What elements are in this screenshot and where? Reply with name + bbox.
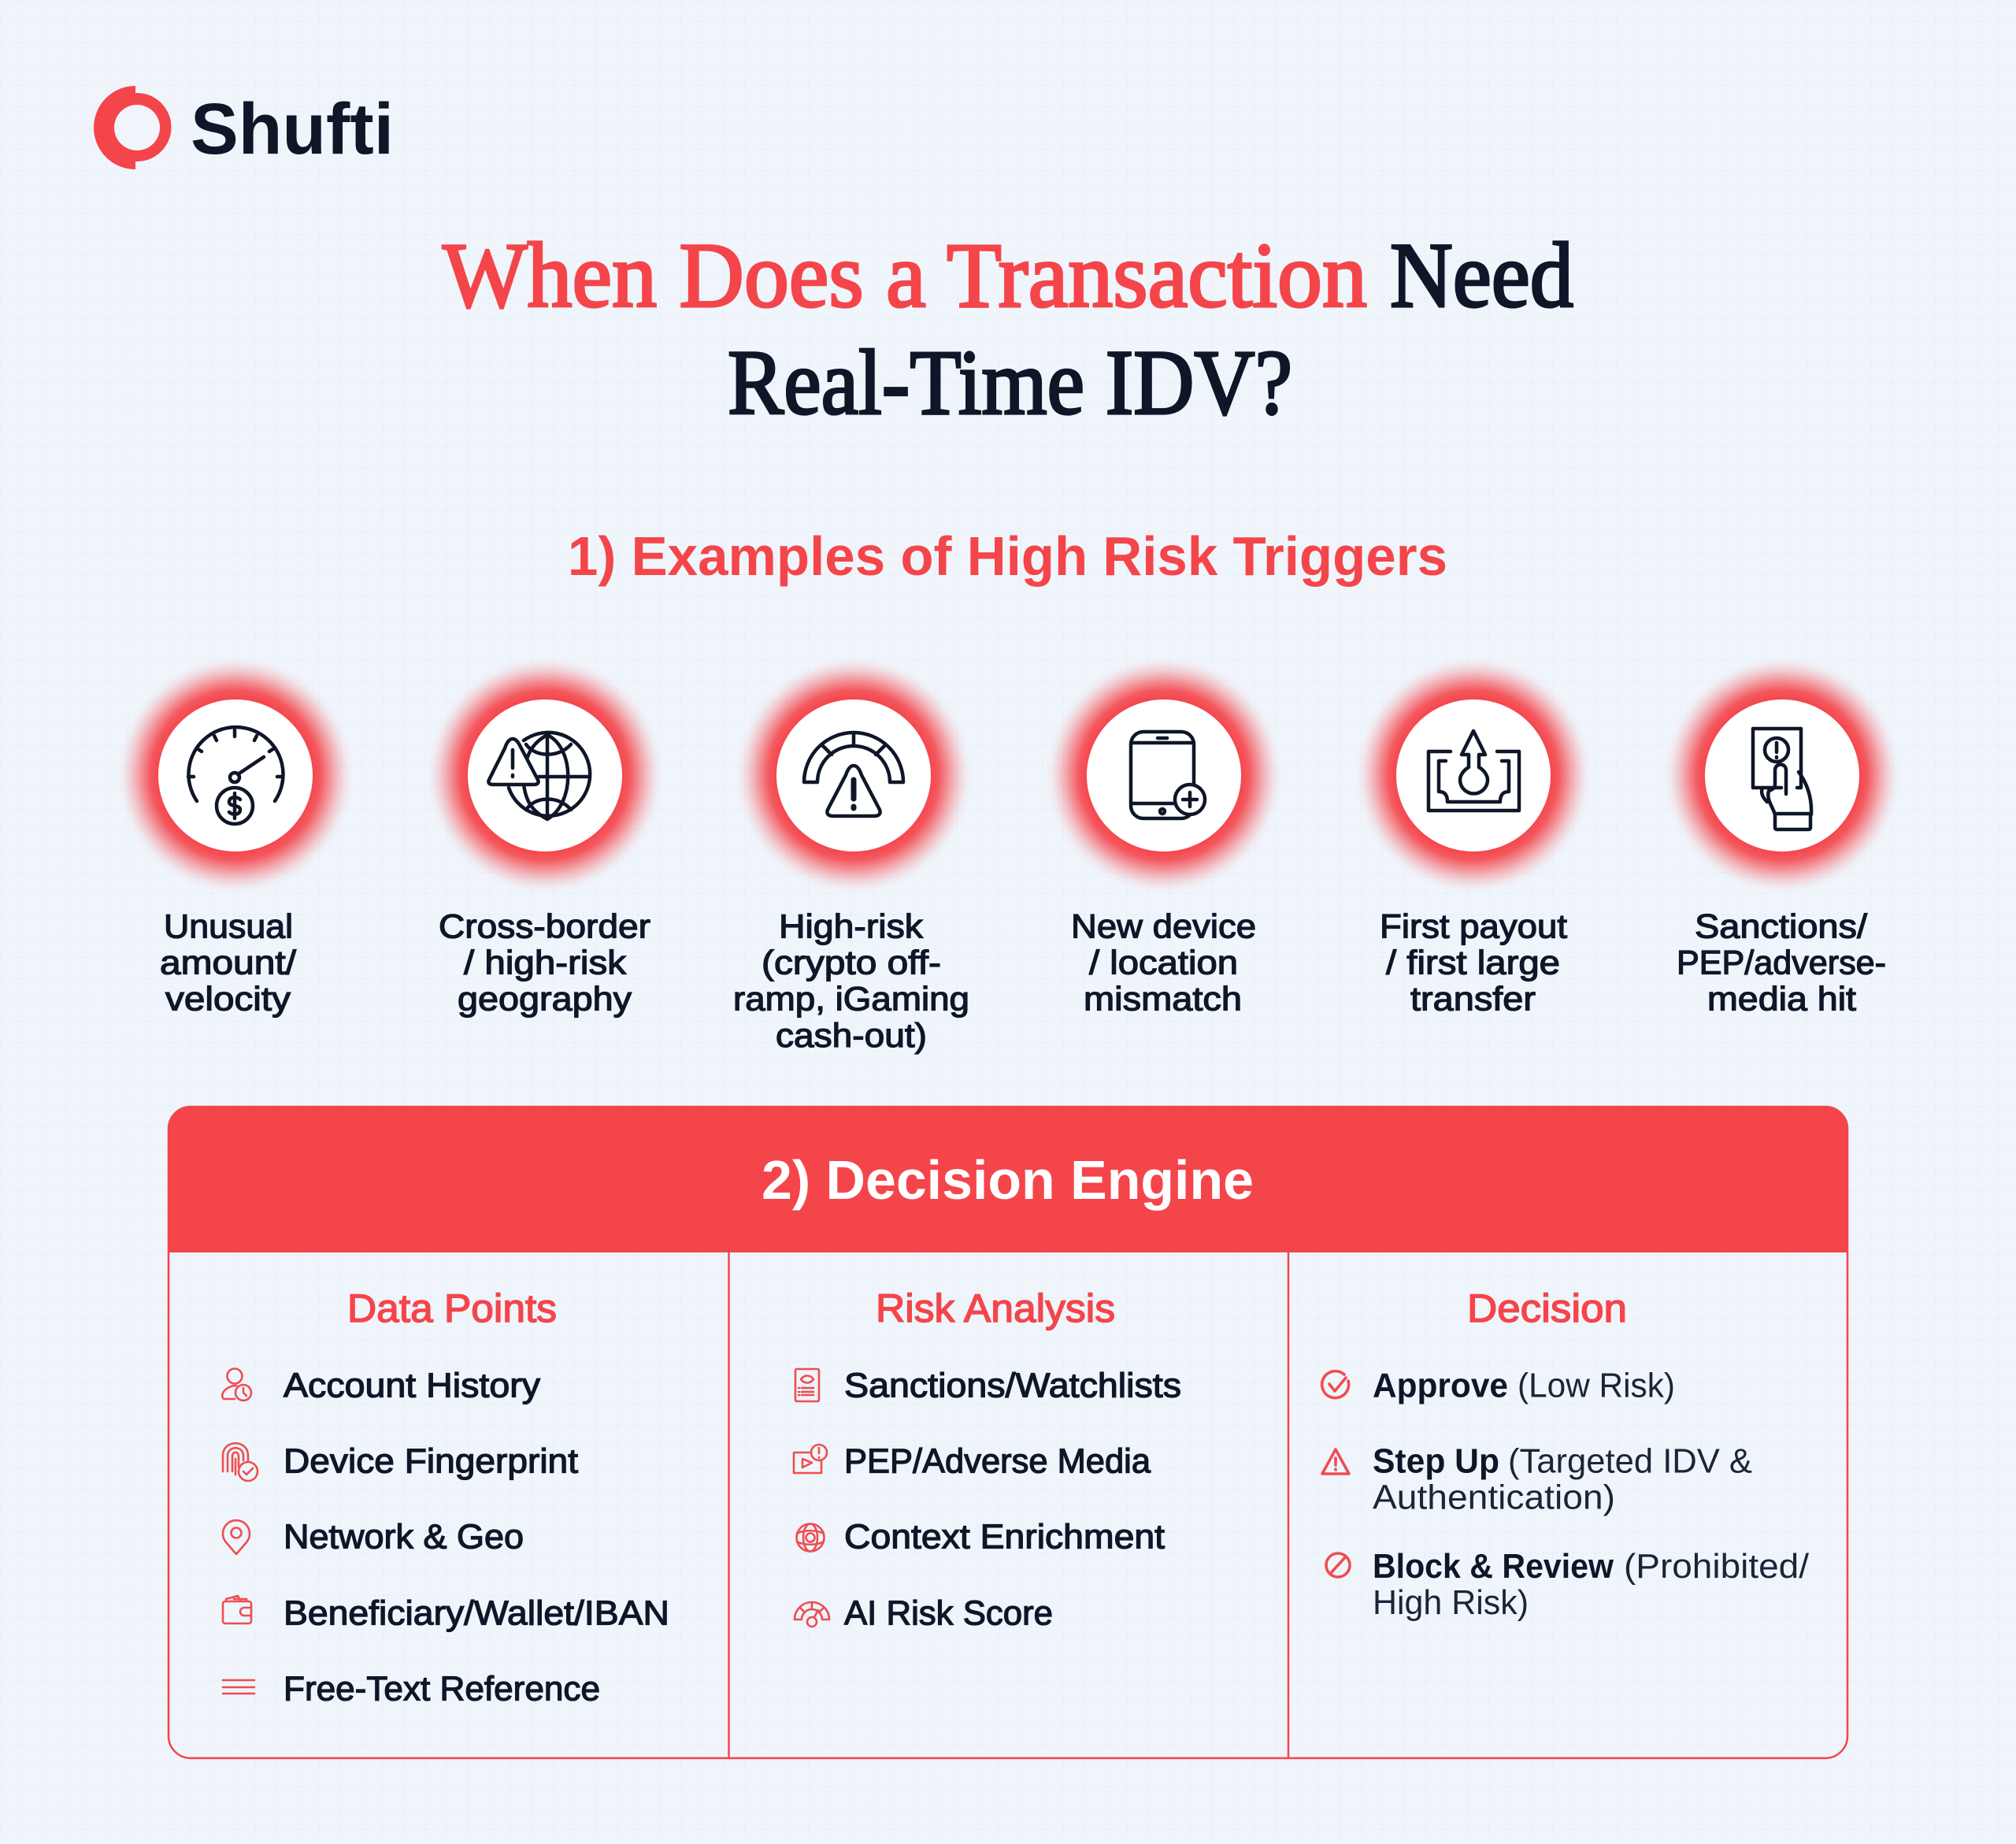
- logo: Shufti: Shufti: [191, 89, 394, 169]
- panel header: 2) Decision Engine: [762, 1149, 1254, 1211]
- column: risk analysis: Context Enrichment: [844, 1517, 1165, 1556]
- panel: decision engine: [169, 1107, 1847, 1758]
- trigger: new device / location mismatch: [1046, 657, 1282, 1018]
- trigger: cross-border / high-risk geography: Cross-border: [439, 907, 650, 945]
- step up text: Step Up: [1373, 1441, 1499, 1481]
- trigger: first payout / first large transfer: / first large: [1386, 944, 1560, 981]
- icon: globe with warning: [488, 733, 590, 819]
- column: risk analysis: PEP/Adverse Media: [844, 1441, 1151, 1481]
- trigger: high-risk crypto off-ramp, iGaming cash-out: cash-out): [776, 1017, 927, 1055]
- column: data points: Data Points: [347, 1286, 557, 1330]
- panel header: [169, 1107, 1847, 1252]
- approve text: (Low Risk): [1518, 1366, 1675, 1405]
- icon: money upload tray: [1429, 731, 1519, 811]
- trigger: sanctions / PEP / adverse-media hit: media hit: [1707, 980, 1856, 1018]
- block and review text: (Prohibited/: [1624, 1547, 1810, 1586]
- trigger: sanctions / PEP / adverse-media hit: PEP/adverse-: [1677, 944, 1886, 981]
- column: decision: Decision: [1467, 1286, 1627, 1330]
- trigger: new device / location mismatch: New device: [1071, 907, 1256, 945]
- column: decision: [1322, 1286, 1810, 1622]
- icon: warning triangle: [1322, 1449, 1349, 1474]
- trigger: cross-border / high-risk geography: / high-risk: [464, 944, 627, 981]
- trigger: unusual amount / velocity: [117, 657, 354, 1018]
- icon: speedometer with dollar: [188, 727, 284, 824]
- column: data points: [222, 1286, 669, 1708]
- icon: risk gauge with warning: [804, 733, 903, 816]
- trigger: high-risk crypto off-ramp, iGaming cash-out: (crypto off-: [762, 944, 941, 981]
- column: data points: Beneficiary/Wallet/IBAN: [284, 1594, 669, 1632]
- icon: account clock: [222, 1369, 251, 1401]
- column: risk analysis: AI Risk Score: [844, 1594, 1053, 1632]
- column: data points: Device Fingerprint: [284, 1441, 578, 1481]
- title: [443, 224, 1573, 434]
- trigger: unusual amount / velocity: amount/: [160, 944, 296, 981]
- trigger: unusual amount / velocity: Unusual: [164, 907, 293, 945]
- column: risk analysis: Sanctions/Watchlists: [844, 1366, 1181, 1405]
- icon: fingerprint check: [223, 1443, 258, 1481]
- title: Need: [1390, 224, 1573, 327]
- column: risk analysis: [794, 1286, 1181, 1632]
- trigger: first payout / first large transfer: First payout: [1380, 907, 1567, 945]
- trigger: cross-border / high-risk geography: [427, 657, 663, 1018]
- icon: hand holding alert card: [1753, 729, 1811, 829]
- icon: text lines: [223, 1680, 254, 1694]
- icon: approve check: [1322, 1371, 1349, 1398]
- trigger: unusual amount / velocity: velocity: [165, 980, 291, 1018]
- icon: watchlist document: [795, 1369, 819, 1401]
- column: data points: Account History: [284, 1366, 540, 1405]
- logo: Shufti: [94, 86, 394, 169]
- icon: block: [1326, 1553, 1350, 1577]
- icon: wallet: [223, 1596, 251, 1623]
- step up text: Authentication): [1373, 1478, 1615, 1517]
- trigger: first payout / first large transfer: transfer: [1410, 980, 1536, 1018]
- column: risk analysis: Risk Analysis: [876, 1286, 1115, 1330]
- trigger: sanctions / PEP / adverse-media hit: Sanctions/: [1695, 907, 1867, 945]
- icon: adverse media video: [794, 1445, 827, 1473]
- block and review text: High Risk): [1373, 1583, 1529, 1622]
- title: Real-Time IDV?: [728, 331, 1292, 434]
- trigger: high-risk crypto off-ramp, iGaming cash-out: ramp, iGaming: [733, 980, 969, 1018]
- icon: location pin: [223, 1520, 250, 1554]
- block and review text: Block & Review: [1373, 1547, 1614, 1586]
- trigger: high-risk crypto off-ramp, iGaming cash-out: [733, 657, 972, 1055]
- icon: AI risk gauge: [795, 1602, 829, 1627]
- trigger: sanctions / PEP / adverse-media hit: [1664, 657, 1900, 1018]
- step up text: [1373, 1441, 1752, 1517]
- trigger: new device / location mismatch: mismatch: [1084, 980, 1242, 1018]
- block and review text: [1373, 1547, 1810, 1622]
- title: When Does a Transaction: [443, 224, 1367, 327]
- icon: phone with plus: [1131, 732, 1205, 818]
- icon: context globe: [797, 1523, 824, 1552]
- trigger: cross-border / high-risk geography: geography: [458, 980, 632, 1018]
- column: data points: Network & Geo: [284, 1517, 524, 1556]
- heading: examples of high risk triggers: 1) Examples of High Risk Triggers: [568, 525, 1447, 587]
- approve text: [1373, 1366, 1675, 1405]
- approve text: Approve: [1373, 1366, 1508, 1405]
- trigger: high-risk crypto off-ramp, iGaming cash-out: High-risk: [779, 907, 924, 945]
- trigger: new device / location mismatch: / location: [1089, 944, 1238, 981]
- trigger: first payout / first large transfer: [1355, 657, 1592, 1018]
- step up text: (Targeted IDV &: [1508, 1441, 1752, 1481]
- column: data points: Free-Text Reference: [284, 1670, 600, 1708]
